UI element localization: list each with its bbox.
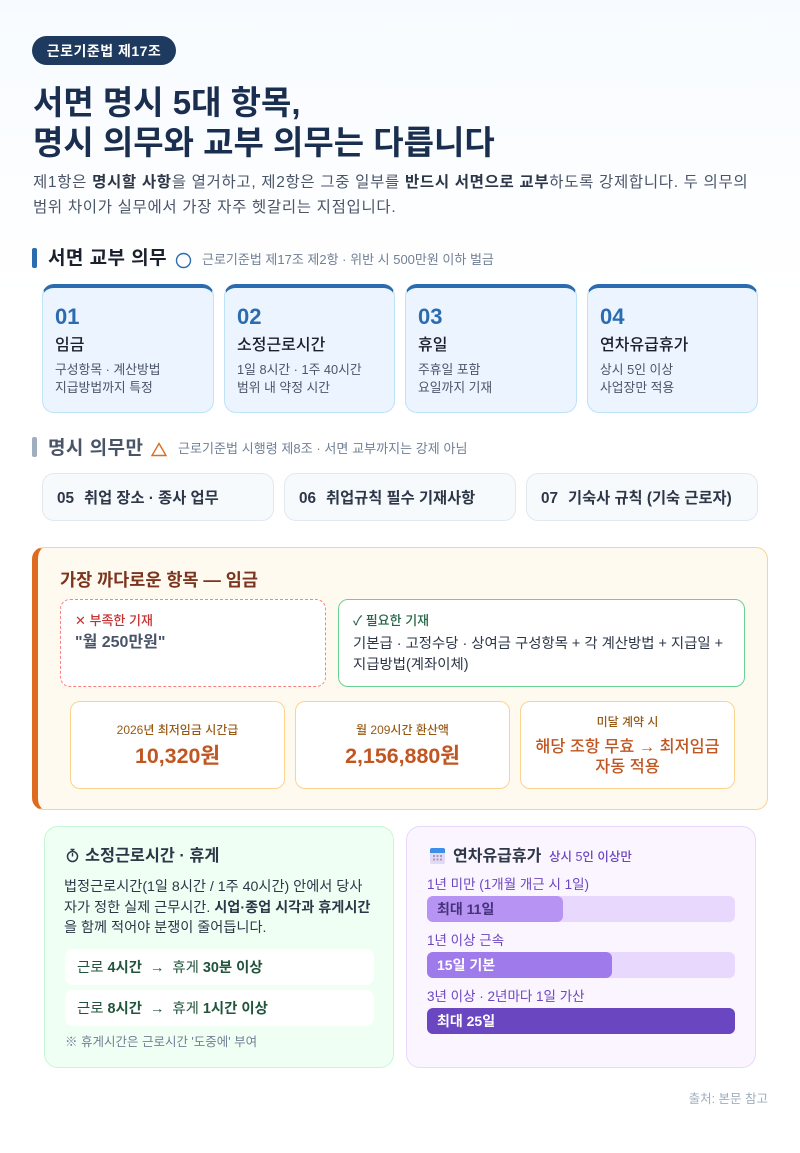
- leave bar 3: [427, 1008, 735, 1034]
- box text: [353, 636, 723, 673]
- card 02: [224, 284, 395, 413]
- panel: wage pitfalls: [32, 547, 768, 810]
- intro paragraph: 제1항은 명시할 사항을 열거하고, 제2항은 그중 일부를 반드시 서면으로 교부하도록 강제합니다. 두 의무의: [33, 174, 748, 191]
- stat value: 자동 적용: [595, 758, 660, 776]
- break rule 1: 근로 4시간 → 휴게 30분 이상: [77, 960, 263, 976]
- tier label 1: 1년 미만 (1개월 개근 시 1일): [427, 877, 589, 892]
- panel heading: 가장 까다로운 항목 — 임금: [60, 570, 258, 590]
- section note: 근로기준법 제17조 제2항 · 위반 시 500만원 이하 벌금: [202, 252, 494, 266]
- card description: 범위 내 약정 시간: [237, 380, 330, 395]
- number: 03: [418, 304, 442, 329]
- icon: stopwatch: [66, 848, 78, 862]
- stat label: 2026년 최저임금 시간급: [117, 723, 238, 737]
- icon: triangle: [150, 442, 168, 456]
- bar fill: 최대 25일: [437, 1013, 495, 1029]
- stat value: 2,156,880원: [345, 744, 460, 768]
- break rule 2: 근로 8시간 → 휴게 1시간 이상: [77, 1001, 268, 1017]
- note: ※ 휴게시간은 근로시간 '도중에' 부여: [65, 1035, 257, 1049]
- box text: 기본급 · 고정수당 · 상여금 구성항목 + 각 계산방법 + 지급일 +: [353, 636, 723, 652]
- source note: 출처: 본문 참고: [689, 1092, 768, 1106]
- panel paragraph: 법정근로시간(1일 8시간 / 1주 40시간) 안에서 당사: [64, 879, 362, 895]
- panel paragraph: [64, 879, 370, 936]
- section title: 서면 교부 의무: [48, 248, 167, 269]
- number: 04: [600, 304, 624, 329]
- title: 서면 명시 5대 항목,: [33, 84, 301, 121]
- stat label: 미달 계약 시: [597, 715, 658, 729]
- panel subtitle: 상시 5인 이상만: [549, 850, 632, 864]
- item 06: 06 취업규칙 필수 기재사항: [299, 490, 475, 507]
- item 05: [42, 473, 274, 521]
- card description: 사업장만 적용: [600, 380, 674, 395]
- panel: working hours and breaks: [44, 826, 394, 1068]
- card description: [55, 362, 161, 395]
- box text: "월 250만원": [75, 634, 165, 651]
- card description: [600, 362, 674, 395]
- item 07: 07 기숙사 규칙 (기숙 근로자): [541, 490, 732, 507]
- leave bar 2: [427, 952, 735, 978]
- section heading: written delivery duty: [32, 248, 494, 269]
- number: 01: [55, 304, 79, 329]
- item 06: [284, 473, 516, 521]
- badge: law reference: [32, 36, 176, 65]
- section heading: statement duty only: [32, 437, 468, 458]
- stat value: [535, 738, 720, 776]
- panel: annual paid leave: [406, 826, 756, 1068]
- title: [33, 84, 495, 161]
- break rule 1: [65, 949, 374, 985]
- intro paragraph: 범위 차이가 실무에서 가장 자주 헷갈리는 지점입니다.: [33, 199, 396, 216]
- icon: calendar: [430, 848, 445, 864]
- box text: 지급방법(계좌이체): [353, 657, 469, 673]
- card 03: [405, 284, 577, 413]
- bar fill: [427, 1008, 735, 1034]
- bar fill: 최대 11일: [437, 901, 494, 917]
- card title: 휴일: [418, 337, 447, 354]
- box label: ✕ 부족한 기재: [75, 613, 153, 628]
- badge: law reference: 근로기준법 제17조: [47, 43, 161, 59]
- card description: 1일 8시간 · 1주 40시간: [237, 362, 362, 377]
- section marker bar: [32, 437, 37, 457]
- leave bar 1: [427, 896, 735, 922]
- section note: 근로기준법 시행령 제8조 · 서면 교부까지는 강제 아님: [178, 440, 468, 456]
- card description: 주휴일 포함: [418, 362, 480, 377]
- item 07: [526, 473, 758, 521]
- panel paragraph: 자가 정한 실제 근무시간. 시업·종업 시각과 휴게시간: [64, 900, 370, 916]
- section title: 명시 의무만: [48, 438, 143, 458]
- number: 02: [237, 304, 261, 329]
- panel paragraph: 을 함께 적어야 분쟁이 줄어듭니다.: [64, 920, 266, 936]
- stat label: 월 209시간 환산액: [356, 723, 449, 737]
- icon: circle: [176, 252, 192, 268]
- panel title: 소정근로시간 · 휴게: [85, 847, 219, 865]
- title: 명시 의무와 교부 의무는 다릅니다: [33, 124, 495, 161]
- box: required wording: [338, 599, 745, 687]
- card description: [237, 362, 362, 395]
- card 04: [587, 284, 758, 413]
- bar fill: [427, 896, 563, 922]
- stat value: 해당 조항 무효 → 최저임금: [535, 738, 720, 756]
- panel title: 연차유급휴가: [453, 848, 541, 865]
- break rule 2: [65, 990, 374, 1026]
- stat value: 10,320원: [135, 744, 220, 768]
- card title: 소정근로시간: [237, 337, 325, 354]
- bar fill: [427, 952, 612, 978]
- bar fill: 15일 기본: [437, 957, 495, 973]
- card title: 임금: [55, 337, 84, 354]
- card description: 요일까지 기재: [418, 380, 492, 395]
- box label: ✓ 필요한 기재: [353, 613, 429, 628]
- card description: 구성항목 · 계산방법: [55, 362, 161, 377]
- card title: 연차유급휴가: [600, 337, 688, 354]
- box: insufficient wording: [60, 599, 326, 687]
- tier label 2: 1년 이상 근속: [427, 933, 504, 948]
- card 01: [42, 284, 214, 413]
- item 05: 05 취업 장소 · 종사 업무: [57, 490, 219, 507]
- stat: monthly equivalent: [295, 701, 510, 789]
- card description: 지급방법까지 특정: [55, 380, 153, 395]
- stat: under minimum contract: [520, 701, 735, 789]
- tier label 3: 3년 이상 · 2년마다 1일 가산: [427, 989, 585, 1004]
- card description: [418, 362, 492, 395]
- card description: 상시 5인 이상: [600, 362, 673, 377]
- section marker bar: [32, 248, 37, 268]
- intro paragraph: [33, 174, 748, 216]
- stat: minimum hourly wage: [70, 701, 285, 789]
